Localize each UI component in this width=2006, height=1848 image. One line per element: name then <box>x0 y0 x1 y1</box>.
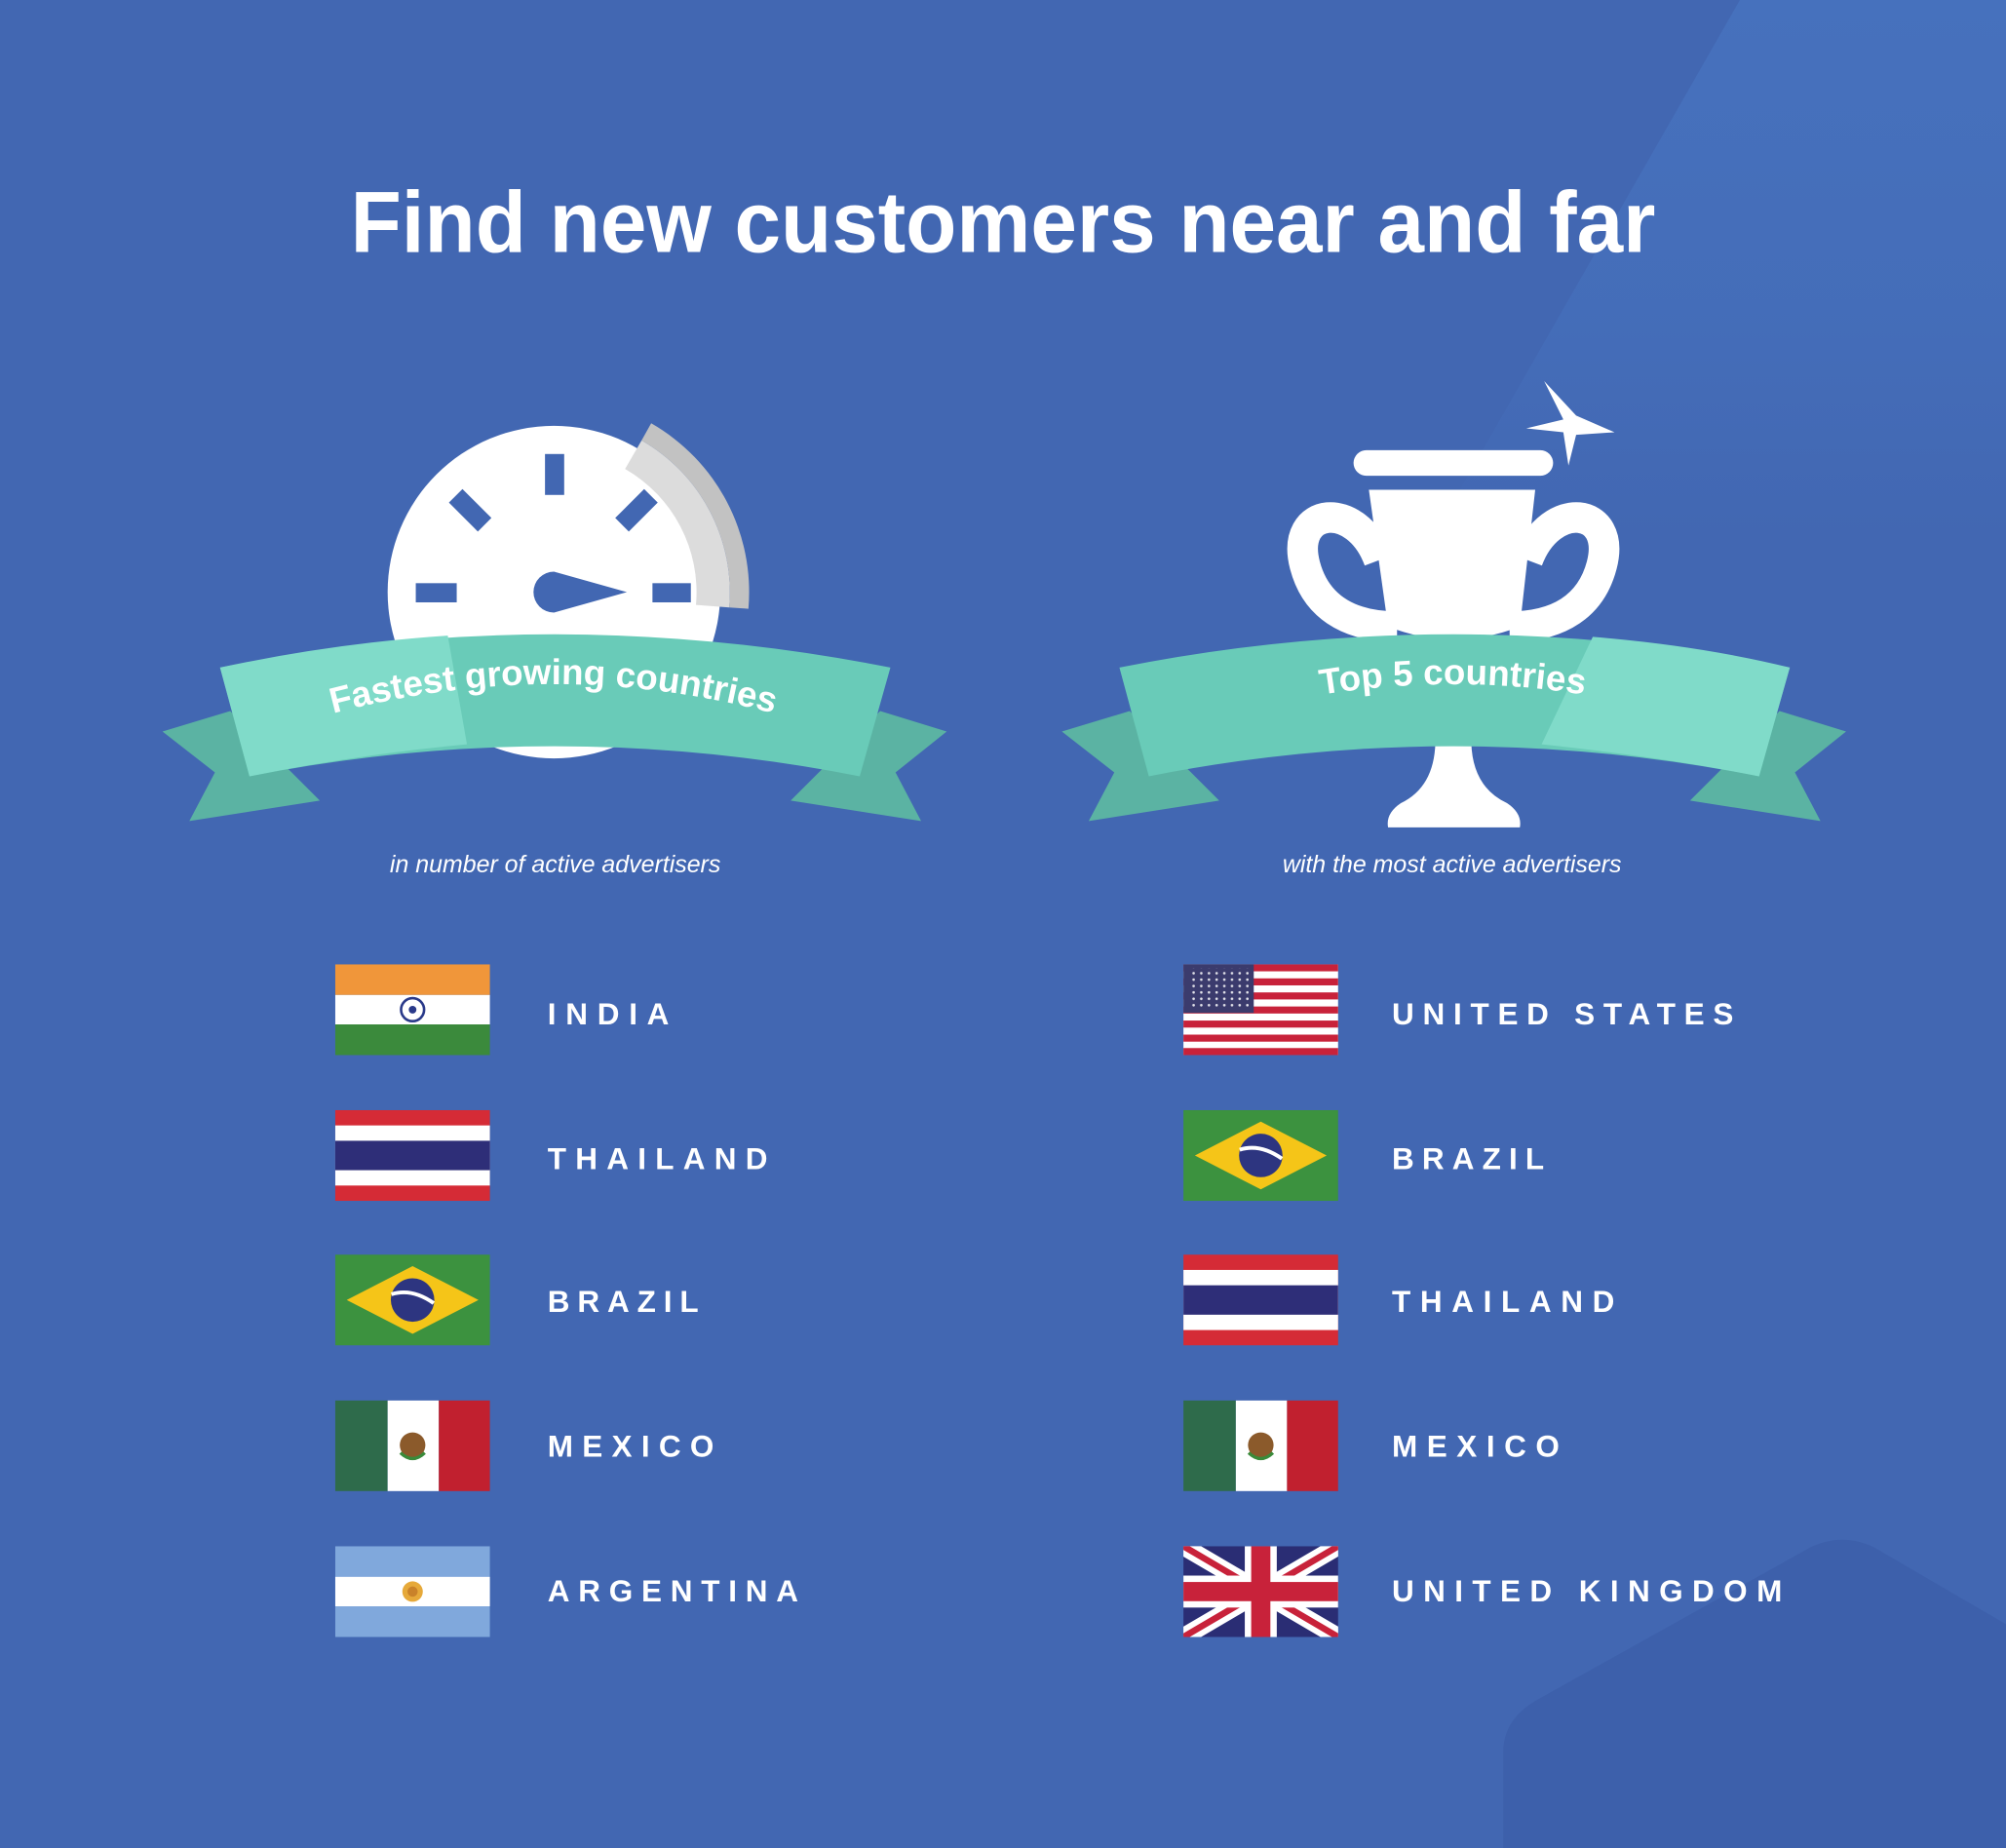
icon: trophy with ribbon <box>1062 381 1846 828</box>
icon: star <box>1526 381 1614 466</box>
list: top 5 <box>1183 964 1782 1637</box>
row: Brazil: BRAZIL <box>548 1284 699 1319</box>
row: United States: UNITED STATES <box>1392 996 1733 1031</box>
row: United States <box>1183 964 1733 1055</box>
row: Mexico: MEXICO <box>548 1428 714 1463</box>
row: Brazil <box>335 1254 699 1345</box>
decorative light diagonal <box>1433 0 2006 537</box>
subtitle left: in number of active advertisers <box>390 851 720 878</box>
decorative dark shape <box>1503 1540 2006 1848</box>
ribbon: fastest growing <box>162 634 946 821</box>
title: Find new customers near and far <box>351 173 1655 270</box>
row: Thailand: THAILAND <box>548 1140 767 1175</box>
row: Thailand <box>1183 1254 1614 1345</box>
row: Argentina: ARGENTINA <box>548 1573 798 1608</box>
row: Argentina <box>335 1546 798 1637</box>
ribbon: top 5 <box>1062 634 1846 821</box>
subtitle right: with the most active advertisers <box>1283 851 1622 878</box>
row: Brazil: BRAZIL <box>1392 1140 1544 1175</box>
icon: speedometer with ribbon <box>162 423 946 821</box>
row: India <box>335 964 669 1055</box>
row: Mexico: MEXICO <box>1392 1428 1560 1463</box>
row: India: INDIA <box>548 996 669 1031</box>
row: Mexico <box>1183 1401 1560 1491</box>
list: fastest growing <box>335 964 798 1637</box>
row: Brazil <box>1183 1110 1544 1201</box>
row: Mexico <box>335 1401 714 1491</box>
row: Thailand <box>335 1110 767 1201</box>
row: United Kingdom <box>1183 1546 1782 1637</box>
ribbon: top 5: Top 5 countries <box>1318 661 1585 696</box>
row: United Kingdom: UNITED KINGDOM <box>1392 1573 1782 1608</box>
row: Thailand: THAILAND <box>1392 1284 1614 1319</box>
ribbon: fastest growing: Fastest growing countries <box>329 658 776 713</box>
